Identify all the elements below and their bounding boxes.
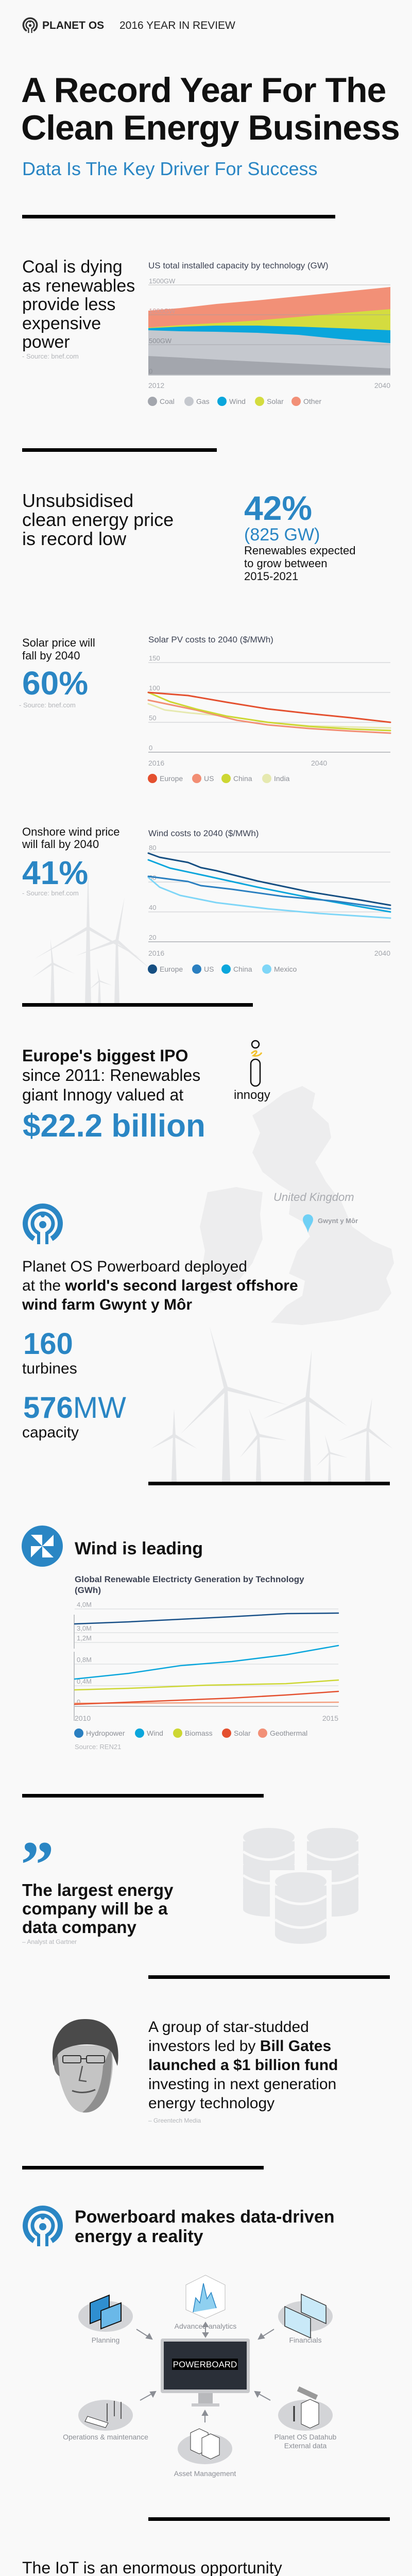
text: powerboard deployed: wind farm Gwynt y Môr	[22, 1296, 192, 1313]
area chart: US capacity: 0	[149, 367, 152, 375]
line chart: global generation: 3,0M	[77, 1624, 92, 1632]
panel: coal	[22, 257, 135, 360]
stat: 576MW capacity: 576MW	[23, 1391, 126, 1425]
title	[21, 71, 400, 147]
quote: data company: The largest energy	[22, 1880, 173, 1900]
line chart: wind: Europe	[160, 965, 183, 973]
line chart: wind: US	[204, 965, 214, 973]
line chart: global generation: 4,0M	[77, 1601, 92, 1608]
stat: 42%: (825 GW)	[244, 525, 320, 545]
text: bill gates fund: investors led by Bill Gates	[148, 2038, 331, 2055]
line chart: global generation: 0,4M	[77, 1677, 92, 1685]
logo: innogy	[234, 1040, 270, 1102]
line chart: solar: 150	[149, 654, 160, 662]
chart title: wind: Wind costs to 2040 ($/MWh)	[148, 828, 259, 838]
line chart: wind: Mexico	[274, 965, 297, 973]
source: REN21: Source: REN21	[75, 1743, 121, 1751]
heading: wind is leading: Wind is leading	[75, 1539, 203, 1558]
diagram: powerboard ecosystem	[63, 2275, 337, 2478]
line chart: solar: 2040	[311, 759, 327, 767]
icon: planet os logo small	[23, 18, 38, 33]
line chart: global generation: 0,8M	[77, 1656, 92, 1664]
heading: coal: provide less	[22, 295, 115, 314]
line chart: solar	[147, 654, 391, 783]
area chart: US capacity: 1000GW	[149, 307, 176, 315]
logo: innogy: innogy	[234, 1088, 270, 1102]
area chart: US capacity: Solar	[267, 397, 284, 405]
area chart: US capacity: 500GW	[149, 337, 172, 345]
line chart: global generation: Hydropower	[86, 1729, 125, 1737]
stat: 576MW capacity	[22, 1391, 126, 1441]
quote: data company	[22, 1880, 173, 1937]
line chart: global generation: 2015	[322, 1714, 338, 1722]
line chart: wind: 60	[149, 874, 156, 882]
area chart: US capacity: Coal	[160, 397, 175, 405]
heading: coal: expensive	[22, 313, 101, 333]
line chart: wind: China	[233, 965, 252, 973]
line chart: solar: 0	[149, 744, 152, 752]
text: – Greentech Media	[148, 2117, 201, 2124]
title: Clean Energy Business	[21, 108, 400, 147]
stat: 160 turbines	[22, 1327, 77, 1377]
text: unsubsidised	[22, 490, 174, 549]
text: innogy IPO	[22, 1046, 200, 1104]
line chart: solar: 100	[149, 684, 160, 692]
chart title: global renewable: (GWh)	[75, 1585, 101, 1595]
panel: onshore wind: - Source: bnef.com	[22, 889, 79, 897]
analytics	[186, 2275, 225, 2318]
icon: map pin: Gwynt y Môr	[318, 1217, 358, 1225]
panel: solar: Solar price will	[22, 636, 95, 649]
panel: onshore wind: Onshore wind price	[22, 825, 120, 838]
text: powerboard deployed	[22, 1258, 298, 1313]
diagram: powerboard ecosystem: Planet OS Datahub	[274, 2433, 337, 2441]
subtitle: Data Is The Key Driver For Success	[22, 158, 318, 179]
stat: 42%	[244, 489, 355, 583]
asset	[178, 2433, 232, 2464]
arrows	[136, 2323, 274, 2422]
icon: planet os logo	[23, 2206, 63, 2246]
chart title: global renewable	[75, 1574, 304, 1595]
chart title: solar: Solar PV costs to 2040 ($/MWh)	[148, 635, 273, 645]
icon: map pin	[303, 1214, 358, 1233]
text: unsubsidised: clean energy price	[22, 509, 174, 530]
text: unsubsidised: Unsubsidised	[22, 490, 133, 511]
line chart: wind: 40	[149, 904, 156, 911]
area chart: US capacity: 2040	[374, 381, 390, 389]
stat: 160 turbines: turbines	[22, 1360, 77, 1377]
diagram: powerboard ecosystem: Planning	[92, 2336, 119, 2344]
text: – Analyst at Gartner	[22, 1938, 77, 1945]
line chart: global generation: 2010	[75, 1714, 91, 1722]
line chart: wind: 20	[149, 934, 156, 941]
datahub	[278, 2400, 333, 2431]
heading: powerboard	[75, 2207, 335, 2246]
text: bill gates fund: energy technology	[148, 2095, 274, 2112]
header: 2016 YEAR IN REVIEW	[119, 20, 235, 31]
diagram: powerboard ecosystem: Advanced analytics	[175, 2322, 236, 2330]
quote: data company: company will be a	[22, 1899, 167, 1918]
stat: 42%: to grow between	[244, 557, 327, 570]
text: bill gates fund: launched a $1 billion fund	[148, 2057, 338, 2074]
heading: coal	[22, 257, 135, 352]
header	[23, 18, 235, 33]
stat: 576MW capacity: capacity	[22, 1424, 79, 1441]
area chart: US capacity: Other	[303, 397, 321, 405]
line chart: wind: 2016	[148, 949, 164, 957]
line chart: global generation	[74, 1601, 339, 1738]
turbines: wind farm section	[150, 1312, 400, 1482]
text: unsubsidised: is record low	[22, 528, 126, 549]
line chart: solar: US	[204, 774, 214, 783]
heading: coal: power	[22, 332, 70, 352]
panel: onshore wind	[22, 825, 120, 897]
text: innogy IPO: since 2011: Renewables	[22, 1066, 200, 1084]
text: innogy IPO: giant Innogy valued at	[22, 1086, 183, 1104]
financials	[278, 2301, 333, 2332]
heading: powerboard: energy a reality	[75, 2227, 203, 2246]
map label: united kingdom: United Kingdom	[273, 1191, 354, 1204]
diagram: powerboard ecosystem: POWERBOARD	[173, 2360, 237, 2369]
stat: 42%: 42%	[244, 489, 312, 527]
line chart: global generation: 0	[77, 1698, 80, 1706]
diagram: powerboard ecosystem: Financials	[289, 2336, 322, 2344]
stat: 42%: Renewables expected	[244, 544, 355, 557]
title: A Record Year For The	[21, 71, 386, 110]
text: bill gates fund: investing in next generation	[148, 2076, 336, 2093]
line chart: wind: 2040	[374, 949, 390, 957]
panel: solar	[19, 636, 95, 709]
text: powerboard deployed: at the world's second largest offshore	[22, 1277, 298, 1294]
line chart: solar: India	[274, 774, 290, 783]
chart title: US capacity: US total installed capacity by technology (GW)	[148, 261, 329, 270]
text: bill gates fund	[148, 2019, 338, 2112]
stat: $22.2 billion: $22.2 billion	[23, 1108, 205, 1144]
illustration: bill gates portrait	[53, 2019, 118, 2112]
stat: 60%: 60%	[22, 665, 88, 702]
area chart: US capacity: 2012	[148, 381, 164, 389]
icon: database	[243, 1828, 358, 1944]
ops	[78, 2400, 133, 2431]
icon: pinwheel	[22, 1526, 63, 1567]
stat: 160 turbines: 160	[23, 1327, 73, 1361]
line chart: solar: Europe	[160, 774, 183, 783]
line chart: solar: 2016	[148, 759, 164, 767]
stat: 42%: 2015-2021	[244, 570, 298, 583]
line chart: solar: China	[233, 774, 252, 783]
line chart: wind: 80	[149, 844, 156, 852]
quote: data company: data company	[22, 1918, 136, 1937]
line chart: global generation: Wind	[147, 1729, 163, 1737]
diagram: powerboard ecosystem: Asset Management	[174, 2469, 236, 2478]
chart title: global renewable: Global Renewable Electricty Generation by Technology	[75, 1574, 304, 1584]
line chart: global generation: 1,2M	[77, 1634, 92, 1642]
uk map	[200, 1086, 394, 1325]
heading: powerboard: Powerboard makes data-driven	[75, 2207, 335, 2227]
planning	[78, 2301, 133, 2332]
text: powerboard deployed: Planet OS Powerboard deployed	[22, 1258, 247, 1275]
diagram: powerboard ecosystem: External data	[284, 2442, 327, 2450]
line chart: wind	[147, 844, 391, 974]
area chart: US capacity: Wind	[229, 397, 246, 405]
panel: solar: fall by 2040	[22, 649, 80, 662]
panel: onshore wind: will fall by 2040	[22, 838, 99, 851]
panel: solar: - Source: bnef.com	[19, 701, 76, 709]
diagram: powerboard ecosystem: Operations & maintenance	[63, 2433, 148, 2441]
header: PLANET OS	[42, 20, 104, 31]
area chart: US capacity: Gas	[196, 397, 210, 405]
line chart: global generation: Solar	[234, 1729, 251, 1737]
heading: coal: as renewables	[22, 276, 135, 296]
line chart: global generation: Biomass	[185, 1729, 213, 1737]
line chart: solar: 50	[149, 714, 156, 722]
icon: planet os logo	[23, 1204, 63, 1244]
stat: 41%: 41%	[22, 854, 88, 891]
monitor	[161, 2338, 250, 2393]
area chart: US capacity	[148, 278, 390, 406]
turbines: wind price section	[28, 866, 163, 1006]
heading: coal: Coal is dying	[22, 257, 123, 277]
text: bill gates fund: A group of star-studded	[148, 2019, 309, 2036]
text: innogy IPO: Europe's biggest IPO	[22, 1046, 188, 1065]
source: - Source: bnef.com	[22, 352, 79, 360]
line chart: global generation: Geothermal	[270, 1729, 307, 1737]
